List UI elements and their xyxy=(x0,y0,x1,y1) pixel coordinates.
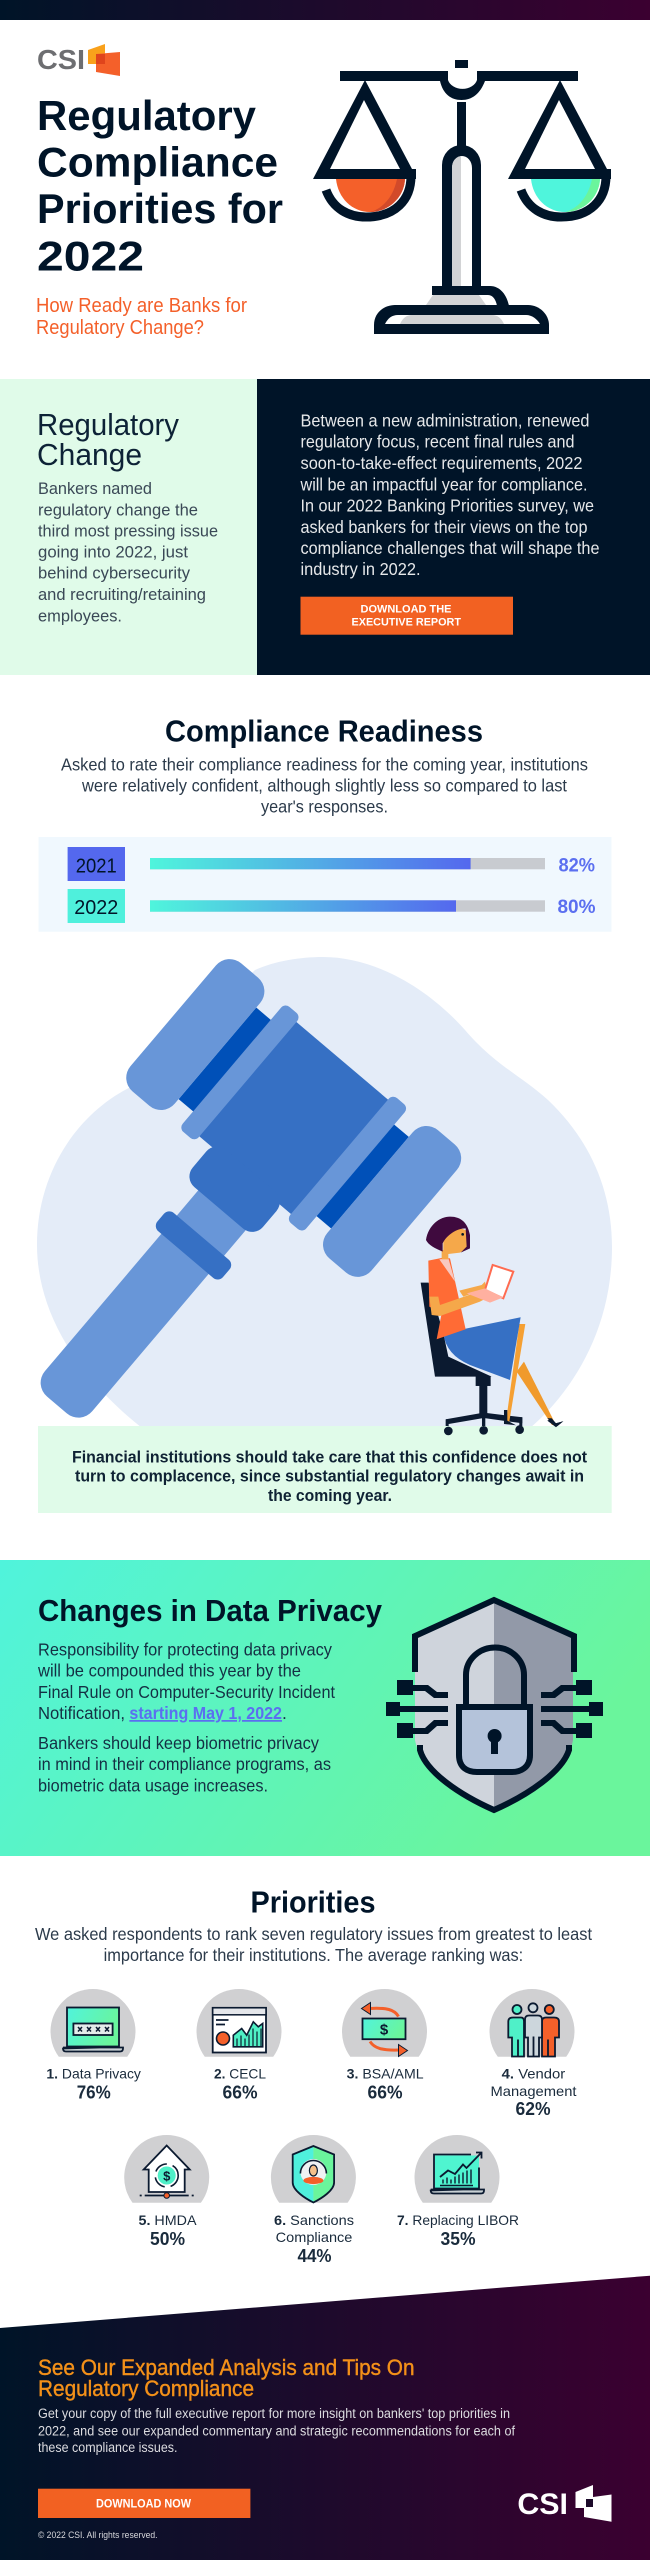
text block: responsibility: Responsibility for protecting data privacy xyxy=(38,1640,332,1660)
gavel stripes xyxy=(179,1008,409,1228)
icon: house with dollar: $ xyxy=(163,2168,171,2184)
icon: balance scale xyxy=(313,60,611,334)
footer text block: these compliance issues. xyxy=(38,2440,178,2455)
heading: regulatory change: Regulatory xyxy=(37,407,179,442)
circuit lines right xyxy=(541,1680,603,1738)
title: 2022 xyxy=(37,232,144,280)
text block: intro: regulatory focus, recent final rules and xyxy=(300,432,574,452)
priority 5: HMDA: 50% xyxy=(150,2229,185,2249)
chair xyxy=(421,1283,524,1435)
heading: changes in data privacy: Changes in Data Privacy xyxy=(38,1593,383,1628)
priority 2: CECL: 2. CECL xyxy=(214,2066,266,2082)
text block: priorities description: importance for their institutions. The average ranking was: xyxy=(104,1945,523,1965)
subtitle: How Ready are Banks for xyxy=(36,295,247,317)
heading: regulatory change: Change xyxy=(37,437,142,472)
priority 2: CECL xyxy=(196,1989,282,2103)
icon: shield with padlock xyxy=(386,1600,603,1811)
text block: intro: will be an impactful year for compliance. xyxy=(300,474,588,494)
top gradient band xyxy=(0,0,650,20)
text block: responsibility: . xyxy=(282,1703,287,1723)
icon: shield with person xyxy=(271,2135,356,2203)
title: Regulatory xyxy=(37,92,257,139)
skirt xyxy=(443,1317,521,1380)
button: download now: DOWNLOAD NOW xyxy=(96,2499,191,2511)
bar chart: compliance readiness xyxy=(38,837,612,932)
gavel handle band xyxy=(153,1208,234,1282)
text block: intro: soon-to-take-effect requirements, 2022 xyxy=(300,453,582,473)
priority 3: BSA/AML: 3. BSA/AML xyxy=(347,2066,424,2082)
text block: priorities description xyxy=(35,1924,592,1965)
priority 5: HMDA xyxy=(124,2135,209,2249)
text block: responsibility xyxy=(37,1640,335,1723)
priority 3: BSA/AML: 66% xyxy=(368,2083,402,2103)
text block: readiness description: Asked to rate their compliance readiness for the coming year, institutions xyxy=(61,755,588,775)
illustration: woman with laptop on chair xyxy=(421,1217,563,1435)
arms xyxy=(429,1282,489,1316)
bar 2021: 82% xyxy=(558,855,595,877)
panel: footer xyxy=(0,2276,650,2560)
icon: money transfer: $ xyxy=(380,2022,389,2038)
title: Priorities for xyxy=(37,185,283,232)
illustration background blob xyxy=(37,957,612,1428)
priority 7: replacing LIBOR xyxy=(397,2135,519,2249)
priority 1: data privacy: 1. Data Privacy xyxy=(46,2066,141,2082)
CSI logo: CSI xyxy=(37,44,85,75)
panel: intro xyxy=(257,379,650,675)
illustration: gavel xyxy=(0,952,469,1504)
priority 2: CECL: 66% xyxy=(222,2083,258,2103)
gavel body xyxy=(198,1021,389,1215)
text block: biometric: biometric data usage increases. xyxy=(38,1775,268,1795)
footer text block xyxy=(38,2406,515,2455)
priority 4: vendor management: Management xyxy=(490,2083,577,2099)
text block: bankers named: Bankers named xyxy=(38,479,152,498)
gavel bands xyxy=(179,1003,409,1233)
panel: changes in data privacy xyxy=(0,1560,650,1856)
text block: responsibility: Final Rule on Computer-Security Incident xyxy=(38,1682,335,1702)
text block: biometric: Bankers should keep biometric privacy xyxy=(38,1733,319,1753)
callout: confidence: Financial institutions should take care that this confidence does not xyxy=(72,1449,587,1467)
bar 2022: 2022 xyxy=(74,897,118,919)
priority 5: HMDA: 5. HMDA xyxy=(138,2212,197,2228)
left pan xyxy=(313,80,416,217)
bar 2021: 2021 xyxy=(76,856,117,878)
text block: intro: asked bankers for their views on the top xyxy=(300,517,588,537)
bar 2021 xyxy=(68,847,595,881)
right pan xyxy=(508,80,611,217)
CSI logo xyxy=(37,44,120,76)
text block: priorities description: We asked respondents to rank seven regulatory issues from greatest to least xyxy=(35,1924,592,1944)
gavel collar xyxy=(184,1141,286,1238)
icon: laptop rising chart xyxy=(414,2135,500,2203)
priority 6: sanctions compliance: 6. Sanctions xyxy=(274,2212,354,2228)
jacket xyxy=(428,1258,466,1339)
text block: bankers named: regulatory change the xyxy=(38,500,198,519)
priority 1: data privacy xyxy=(46,1989,141,2103)
title: Compliance xyxy=(37,138,278,186)
priority 6: sanctions compliance xyxy=(271,2135,356,2266)
priority 6: sanctions compliance: 44% xyxy=(298,2246,332,2266)
text block: bankers named: third most pressing issue xyxy=(38,521,218,540)
icon: three people xyxy=(490,1989,574,2057)
priority 3: BSA/AML xyxy=(342,1989,427,2103)
footer text block: 2022, and see our expanded commentary and strategic recommendations for each of xyxy=(38,2424,515,2439)
text block: intro xyxy=(300,411,600,579)
text block: bankers named: going into 2022, just xyxy=(38,542,188,561)
text block: responsibility: will be compounded this year by the xyxy=(37,1661,301,1681)
text block: responsibility: starting May 1, 2022 xyxy=(129,1703,282,1723)
text block: biometric xyxy=(38,1733,331,1795)
callout: confidence xyxy=(38,1419,612,1513)
priority 1: data privacy: 76% xyxy=(77,2083,111,2103)
text block: bankers named: and recruiting/retaining xyxy=(38,585,206,604)
footer heading: Regulatory Compliance xyxy=(38,2376,254,2401)
bar 2022: 80% xyxy=(558,896,596,918)
panel: regulatory change xyxy=(0,379,257,675)
legs xyxy=(504,1324,563,1427)
callout: confidence: turn to complacence, since substantial regulatory changes await in xyxy=(75,1468,584,1486)
text block: intro: In our 2022 Banking Priorities survey, we xyxy=(300,496,594,516)
priority 7: replacing LIBOR: 7. Replacing LIBOR xyxy=(397,2212,519,2228)
footer heading: See Our Expanded Analysis and Tips On xyxy=(38,2355,414,2380)
text block: biometric: in mind in their compliance programs, as xyxy=(38,1754,331,1774)
text block: intro: Between a new administration, renewed xyxy=(300,411,590,431)
head xyxy=(426,1217,470,1259)
subtitle xyxy=(36,295,247,339)
priority 6: sanctions compliance: Compliance xyxy=(276,2229,353,2245)
heading: compliance readiness: Compliance Readiness xyxy=(165,714,483,749)
white CSI logo: CSI xyxy=(517,2488,568,2521)
text block: readiness description: year's responses. xyxy=(261,797,388,817)
text block: bankers named xyxy=(38,479,218,625)
text block: readiness description: were relatively confident, although slightly less so compared to last xyxy=(81,776,567,796)
white CSI logo xyxy=(517,2485,612,2522)
priority 7: replacing LIBOR: 35% xyxy=(440,2229,476,2249)
laptop xyxy=(467,1265,513,1303)
button: download executive report xyxy=(300,597,513,635)
title xyxy=(37,92,283,280)
icon: chart window xyxy=(196,1989,282,2057)
priority 4: vendor management: 4. Vendor xyxy=(502,2066,566,2082)
subtitle: Regulatory Change? xyxy=(36,317,204,339)
circuit lines left xyxy=(386,1680,448,1738)
button: download now xyxy=(38,2489,250,2518)
text block: responsibility: Notification, xyxy=(38,1703,125,1723)
text block: readiness description xyxy=(61,755,588,817)
text block: bankers named: employees. xyxy=(38,606,122,625)
text block: bankers named: behind cybersecurity xyxy=(38,564,190,583)
heading: regulatory change xyxy=(37,407,179,472)
text block: intro: compliance challenges that will shape the xyxy=(300,538,600,558)
padlock xyxy=(459,1648,530,1772)
gavel caps xyxy=(119,952,469,1284)
text block: intro: industry in 2022. xyxy=(300,559,420,579)
callout: confidence: the coming year. xyxy=(268,1487,392,1505)
priority 4: vendor management xyxy=(490,1989,577,2119)
priority 4: vendor management: 62% xyxy=(516,2099,550,2119)
heading: priorities: Priorities xyxy=(250,1885,376,1920)
button: download executive report: DOWNLOAD THE xyxy=(360,604,452,616)
button: download executive report: EXECUTIVE REPORT xyxy=(352,616,461,628)
gavel handle xyxy=(33,1177,256,1425)
icon: laptop password xyxy=(50,1989,136,2057)
bar 2022 xyxy=(68,889,596,923)
footer text block: Get your copy of the full executive report for more insight on bankers' top priorities in xyxy=(38,2406,510,2421)
copyright: © 2022 CSI. All rights reserved. xyxy=(38,2530,158,2541)
footer heading xyxy=(38,2355,414,2401)
